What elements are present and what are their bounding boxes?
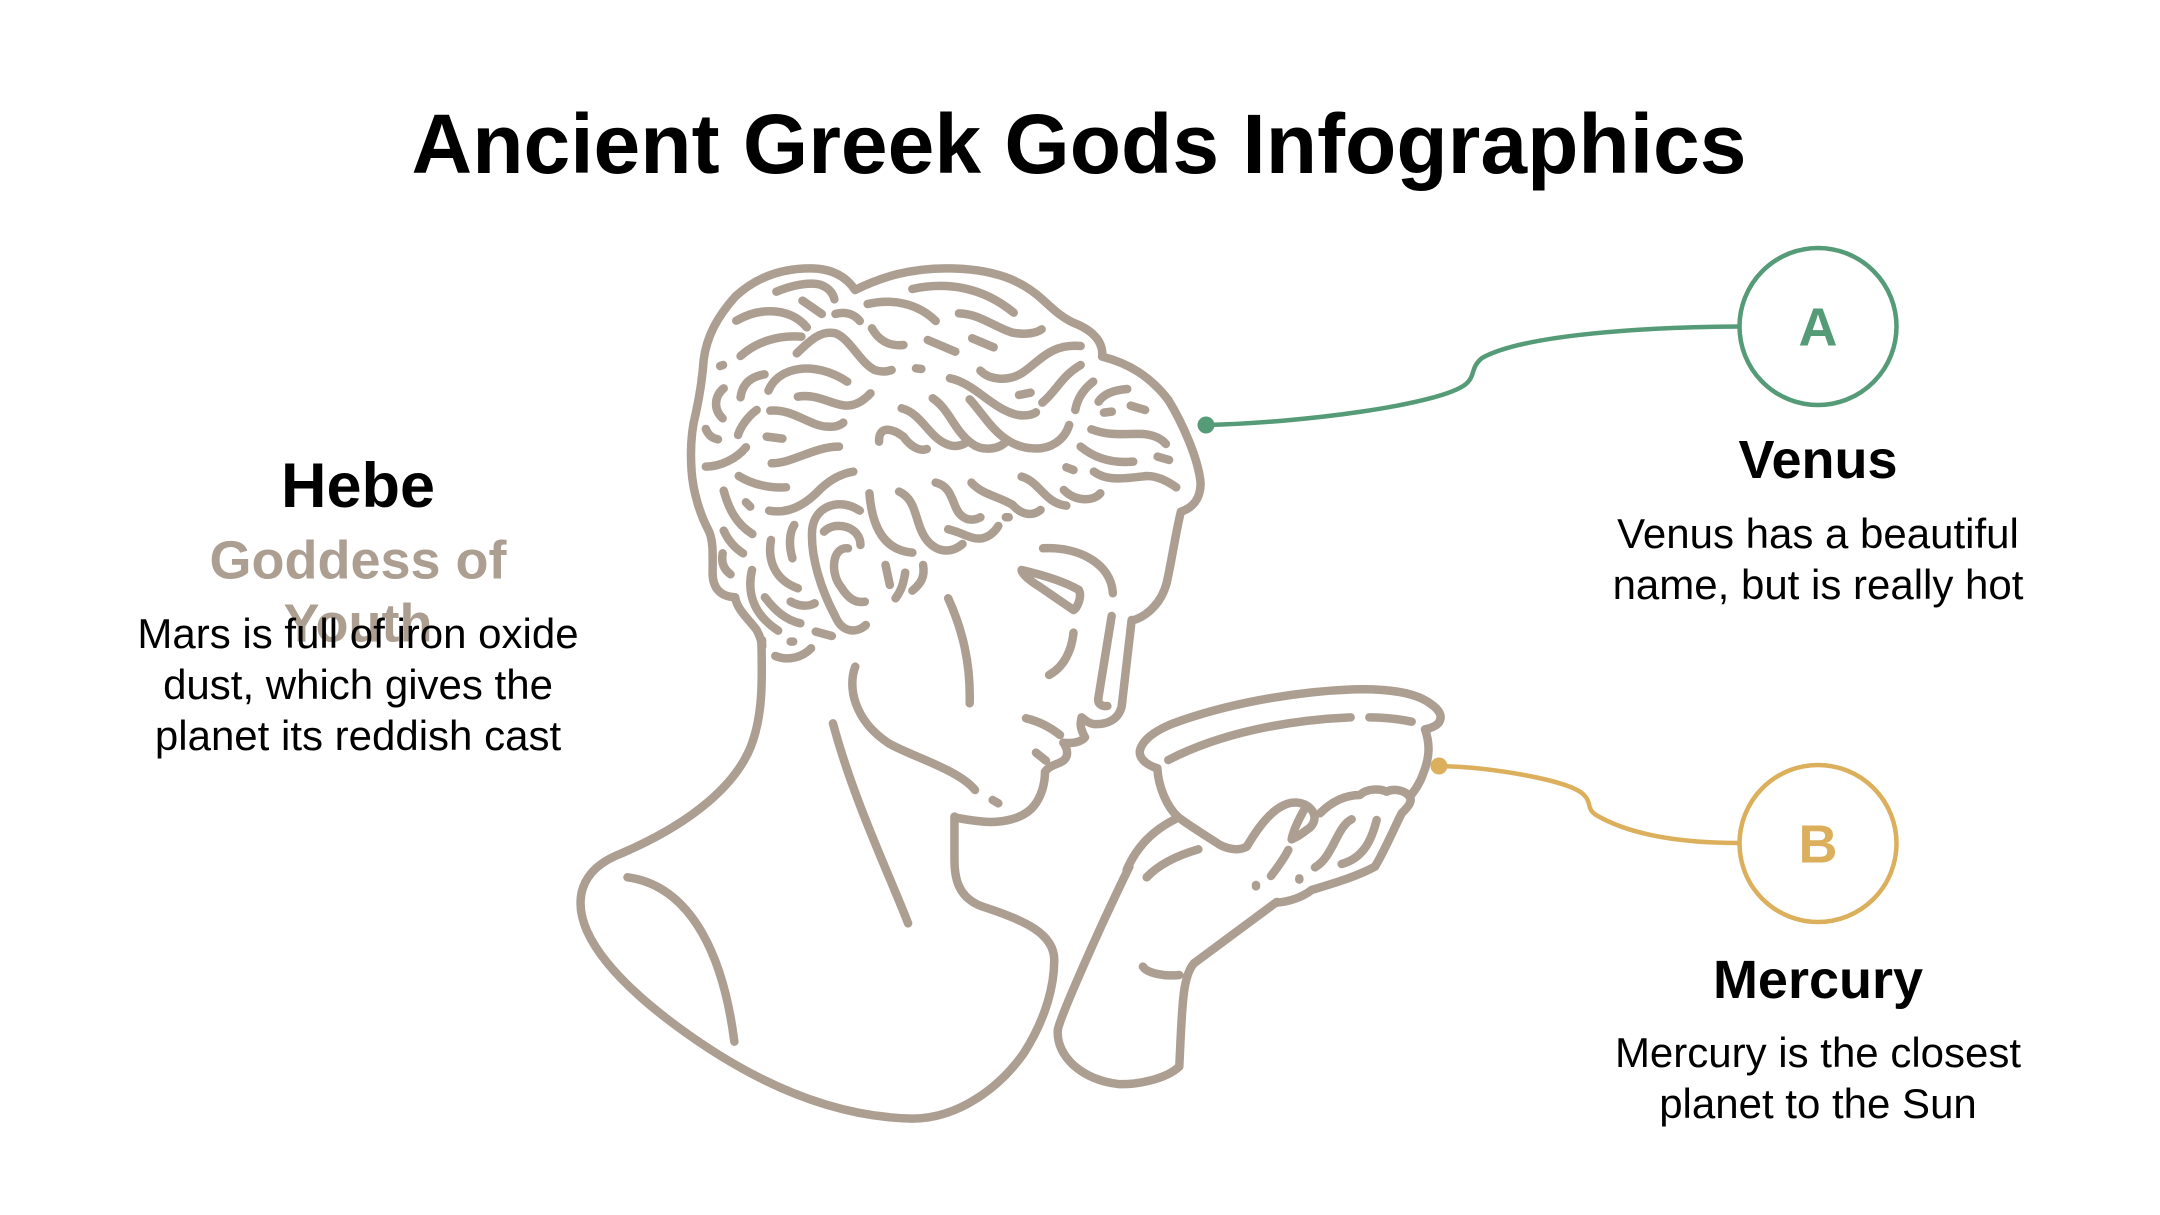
- body text: Mars: Mars is full of iron oxide: [137, 610, 579, 657]
- body text: Venus: name, but is really hot: [1613, 561, 2024, 608]
- circle badge A: [1740, 248, 1896, 405]
- heading: Hebe: Hebe: [281, 451, 435, 521]
- left panel: Hebe: [137, 451, 579, 759]
- heading: Mercury: Mercury: [1713, 950, 1923, 1010]
- heading: Venus: Venus: [1738, 430, 1898, 490]
- subheading: Goddess of Youth: Goddess of: [209, 530, 508, 590]
- connector dot B: [1430, 758, 1448, 774]
- statue neck, shoulders and forearm: [581, 640, 1277, 1119]
- connector line A: [1206, 326, 1740, 425]
- statue nose, lips and chin profile: [955, 616, 1132, 822]
- statue head and hair: [691, 268, 1201, 703]
- connector dot A: [1198, 416, 1214, 434]
- body text: Mars: dust, which gives the: [163, 661, 553, 708]
- connector line B: [1439, 766, 1740, 843]
- statue illustration: Hebe holding a bowl: [581, 268, 1441, 1119]
- letter B: B: [1798, 814, 1838, 874]
- callout B: Mercury: [1430, 758, 2021, 1127]
- callout A: Venus: [1198, 248, 2024, 608]
- title: Ancient Greek Gods Infographics: [412, 97, 1746, 191]
- bowl and cupped hand: [1127, 689, 1441, 903]
- subheading: Goddess of Youth: Youth: [284, 594, 432, 654]
- letter A: A: [1798, 298, 1838, 358]
- circle badge B: [1740, 765, 1896, 922]
- body text: Mercury: planet to the Sun: [1659, 1080, 1977, 1127]
- body text: Venus: Venus has a beautiful: [1617, 510, 2019, 557]
- hand: [1247, 803, 1314, 847]
- bowl: [1140, 689, 1441, 797]
- body text: Mercury: Mercury is the closest: [1615, 1029, 2021, 1076]
- body text: Mars: planet its reddish cast: [155, 712, 561, 759]
